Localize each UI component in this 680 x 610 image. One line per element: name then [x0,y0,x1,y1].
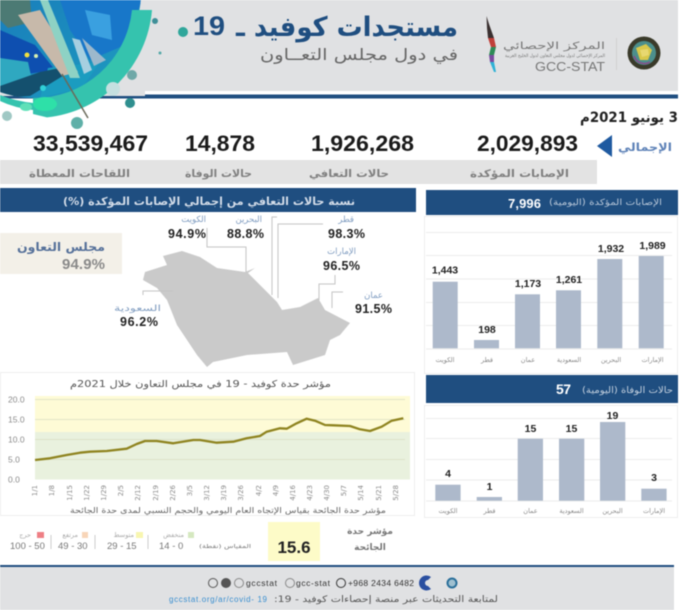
severity scale legend [10,531,252,552]
bar values [445,410,657,493]
total: recoveries [309,131,414,180]
bar labels: الإمارات [641,356,664,364]
severity index label [347,527,393,553]
daily confirmed heading: الإصابات المؤكدة (اليومية) [549,198,662,208]
x axis date labels: 2/12 [134,485,142,501]
bar labels: الكويت [439,507,458,515]
x axis date labels: 4/30 [323,485,331,501]
bar values: 4 [445,468,451,480]
severity scale legend: 100 - 50 [10,541,45,552]
total: recoveries: 1,926,268 [311,131,414,156]
hero image: teal ring and virus collage [0,0,188,129]
arrow: totals marker [597,135,612,157]
label: Kuwait: 94.9% [168,227,206,241]
date: 3 يونيو 2021م [580,110,678,126]
footer note: gccstat.org/ar/covid- 19 [169,595,268,604]
panel: daily confirmed cases [424,190,678,374]
title: 19 [193,11,225,41]
severity scale legend: متوسط [114,531,134,539]
total: vaccines: 33,539,467 [33,131,148,156]
recovery heading: نسبة حالات التعافي من إجمالي الإصابات المؤكدة (%) [63,195,355,208]
label: Kuwait: الكويت [181,215,206,225]
header band [0,0,678,98]
social icons [208,578,346,588]
y axis labels: 15.0 [8,414,25,424]
GCC-STAT logo: المركز الإحصائي [503,41,605,52]
x axis date labels: 5/28 [392,485,400,501]
bar labels: السعودية [559,507,584,515]
y axis labels: 10.0 [8,434,25,444]
bar labels [439,507,665,515]
bar labels: الكويت [436,356,455,364]
footer note [169,595,498,605]
label: Saudi Arabia [114,304,161,329]
total: vaccines: اللقاحات المعطاة [29,168,130,180]
severity index label: الجائحة [354,543,386,553]
label: Saudi Arabia: السعودية [114,304,161,314]
x axis date labels: 4/16 [289,484,297,501]
GCC-STAT logo: GCC-STAT [535,59,605,74]
label: Oman [355,291,392,316]
x axis date labels: 3/26 [237,484,245,501]
GCC recovery callout: مجلس التعاون [17,240,105,255]
contact handles [246,578,414,588]
contact handles: gcc-stat [296,578,331,588]
map: Arabian peninsula [143,251,350,367]
bar labels: الإمارات [643,507,665,515]
panel: daily deaths [424,375,678,518]
total: deaths: 14,878 [185,131,255,156]
severity scale legend: 49 - 30 [58,541,88,552]
x axis date labels: 3/5 [186,485,194,496]
x axis date labels: 3/19 [220,485,228,501]
bar labels: البحرين [601,356,621,364]
y axis labels [8,394,25,484]
x axis date labels: 4/2 [255,485,263,496]
x axis date labels: 5/14 [357,484,365,501]
bar values: 15 [525,423,536,435]
y axis labels: 5.0 [8,454,20,464]
bar labels [436,356,664,364]
label: Qatar: 98.3% [328,227,365,241]
label: Qatar: قطر [337,215,354,225]
title: مستجدات كوفيد ـ [235,12,458,43]
total: deaths [185,131,255,180]
bar labels: السعودية [557,356,581,364]
x axis date labels: 4/23 [306,485,314,501]
total: confirmed: 2,029,893 [477,131,578,156]
recovery heading [0,188,416,212]
x axis date labels: 2/19 [152,485,160,501]
severity scale legend: 29 - 15 [107,541,137,552]
contact handles: gccstat [246,578,278,588]
severity scale legend: مرتفع [62,531,78,539]
bar chart: confirmed by country [433,256,664,348]
x axis date labels: 2/5 [117,485,125,496]
footer [0,565,674,610]
severity scale legend: منخفض [163,531,184,539]
label: Bahrain [227,215,264,241]
bar labels: عمان [523,507,538,515]
x axis date labels: 4/9 [272,485,280,496]
bar values: 19 [607,410,618,422]
gridlines [426,418,672,501]
bar chart: deaths by country [435,422,667,501]
x axis date labels: 1/22 [83,485,91,501]
bar values: 1,443 [432,264,458,276]
label: Kuwait [168,215,206,241]
x axis date labels [31,484,400,501]
footer note: لمتابعة التحديثات عبر منصة إحصاءات كوفيد - 19: [274,595,498,605]
gridlines [426,232,672,349]
bar labels: عمان [521,356,535,364]
x axis date labels: 1/1 [31,485,39,496]
x axis date labels: 5/21 [375,485,383,501]
label: UAE: 96.5% [323,259,360,273]
severity scale legend: حرج [19,531,31,539]
bar values: 3 [651,472,657,484]
bar values: 1,989 [639,240,666,252]
label: Bahrain: البحرين [235,215,262,225]
bar values: 1,261 [556,274,582,286]
GCC-STAT logo: المركز الإحصائي لدول مجلس التعاون لدول الخليج العربية [505,53,605,59]
x axis date labels: 1/8 [48,485,56,496]
daily deaths heading: حالات الوفاة (اليومية) [582,386,673,396]
label: Oman: 91.5% [355,302,392,316]
chart caption: مؤشر حدة الجائحة بقياس الإتجاه العام اليومي والحجم النسبي لمدى حدة الجائحة [70,506,386,516]
bar values: 1 [487,481,493,493]
label: Saudi Arabia: 96.2% [120,315,158,329]
bar values: 1,173 [515,278,541,290]
x axis date labels: 5/7 [340,485,348,496]
y axis labels: 0.0 [8,474,20,484]
GCC emblem [628,36,660,70]
leader lines [143,217,343,308]
GCC recovery callout: 94.9% [62,256,105,273]
total: confirmed [470,131,578,180]
severity scale legend: 14 - 0 [159,541,183,552]
panel: recovery map [0,188,416,367]
total: recoveries: حالات التعافي [309,168,389,180]
daily confirmed heading [426,190,678,215]
bar values [432,240,666,336]
subtitle: في دول مجلس التعــاون [260,45,458,65]
bar labels: قطر [482,507,496,515]
x axis date labels: 1/15 [66,485,74,501]
severity bands [35,396,410,480]
panel: severity line chart [0,372,414,516]
x axis date labels: 2/26 [169,484,177,501]
daily deaths heading: 57 [556,381,571,397]
severity scale legend: المقياس (نقطة) [199,544,252,550]
x axis date labels: 1/29 [100,485,108,501]
x axis date labels: 3/12 [203,485,211,501]
label: Bahrain: 88.8% [227,227,264,241]
label: UAE [323,247,360,273]
y axis labels: 20.0 [8,394,25,404]
severity index label: مؤشر حدة [347,527,393,537]
chart title: مؤشر حدة كوفيد - 19 في مجلس التعاون خلال 2021م [70,379,331,390]
bar values: 15 [566,423,577,435]
bar values: 1,932 [598,243,624,255]
totals band [0,160,597,184]
GCC-STAT logo [486,16,617,74]
label: Qatar [328,215,365,241]
label: Oman: عمان [364,291,383,301]
bar labels: قطر [480,356,493,364]
severity index value [268,522,320,561]
contact handles: +968 2434 6482 [348,578,414,588]
severity index value: 15.6 [277,538,311,557]
icon: GCC-STAT seal [448,578,456,588]
bar values: 198 [478,324,496,336]
bar labels: البحرين [602,507,623,515]
daily confirmed heading: 7,996 [508,196,541,211]
daily deaths heading [426,375,678,403]
GCC recovery callout [0,233,122,274]
severity line [35,418,403,460]
total: deaths: حالات الوفاة [185,168,252,180]
total: vaccines [29,131,148,180]
total: confirmed: الإصابات المؤكدة [470,168,569,180]
icon: platform mark [419,576,431,591]
label: UAE: الإمارات [327,247,356,257]
totals label: الإجمالي [618,140,672,154]
